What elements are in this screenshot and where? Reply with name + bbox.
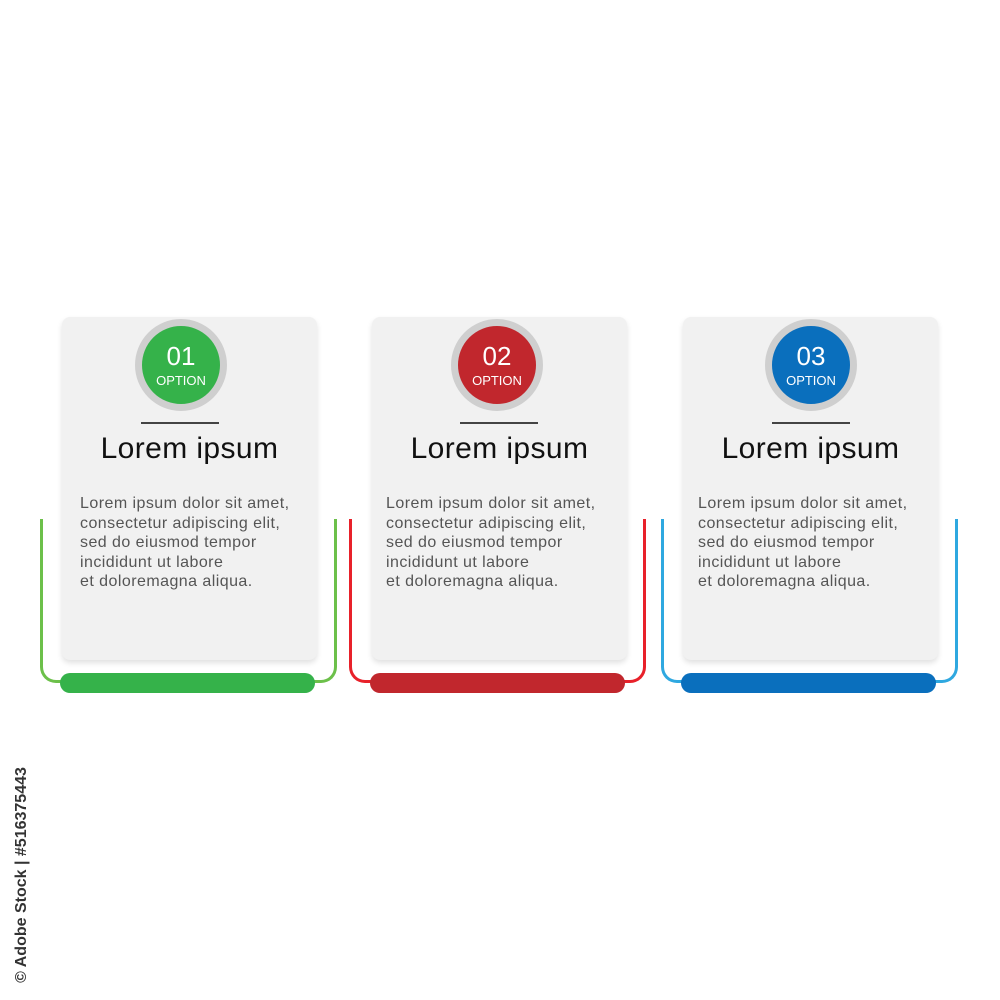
text 2: sed do eiusmod tempor (386, 534, 563, 551)
panel: option 2 (372, 317, 627, 660)
text 2: incididunt ut labore (386, 554, 529, 570)
text 1: sed do eiusmod tempor (80, 534, 257, 551)
text 3: consectetur adipiscing elit, (698, 514, 898, 532)
text 3 (698, 495, 908, 590)
badge 03 (765, 319, 857, 411)
bar: option 2 (370, 673, 625, 693)
text 3: sed do eiusmod tempor (698, 534, 875, 551)
text 3: Lorem ipsum dolor sit amet, (698, 495, 908, 512)
bracket: option 2 (349, 519, 646, 683)
vertical stock caption: © Adobe Stock | #516375443 (13, 767, 30, 983)
text 2: et doloremagna aliqua. (386, 573, 559, 590)
badge 02: OPTION (472, 373, 522, 388)
badge 02 (451, 319, 543, 411)
badge 03: OPTION (786, 373, 836, 388)
text 1: consectetur adipiscing elit, (80, 514, 280, 532)
badge 01 (135, 319, 227, 411)
text 1: Lorem ipsum dolor sit amet, (80, 495, 290, 512)
bracket: option 1 (40, 519, 337, 683)
badge 03: 03 (797, 341, 825, 371)
panel: option 3 (683, 317, 938, 660)
text 2 (386, 495, 596, 590)
text 3: et doloremagna aliqua. (698, 573, 871, 590)
bar: option 3 (681, 673, 936, 693)
badge 02: 02 (483, 341, 511, 371)
badge 01: 01 (167, 341, 195, 371)
heading 1: Lorem ipsum (101, 432, 278, 465)
bracket: option 3 (661, 519, 958, 683)
bar: option 1 (60, 673, 315, 693)
text 2: consectetur adipiscing elit, (386, 514, 586, 532)
heading 2: Lorem ipsum (411, 432, 588, 465)
heading 3: Lorem ipsum (722, 432, 899, 465)
text 1: incididunt ut labore (80, 554, 223, 570)
text 1 (80, 495, 290, 590)
text 2: Lorem ipsum dolor sit amet, (386, 495, 596, 512)
text 1: et doloremagna aliqua. (80, 573, 253, 590)
text 3: incididunt ut labore (698, 554, 841, 570)
panel: option 1 (62, 317, 317, 660)
badge 01: OPTION (156, 373, 206, 388)
